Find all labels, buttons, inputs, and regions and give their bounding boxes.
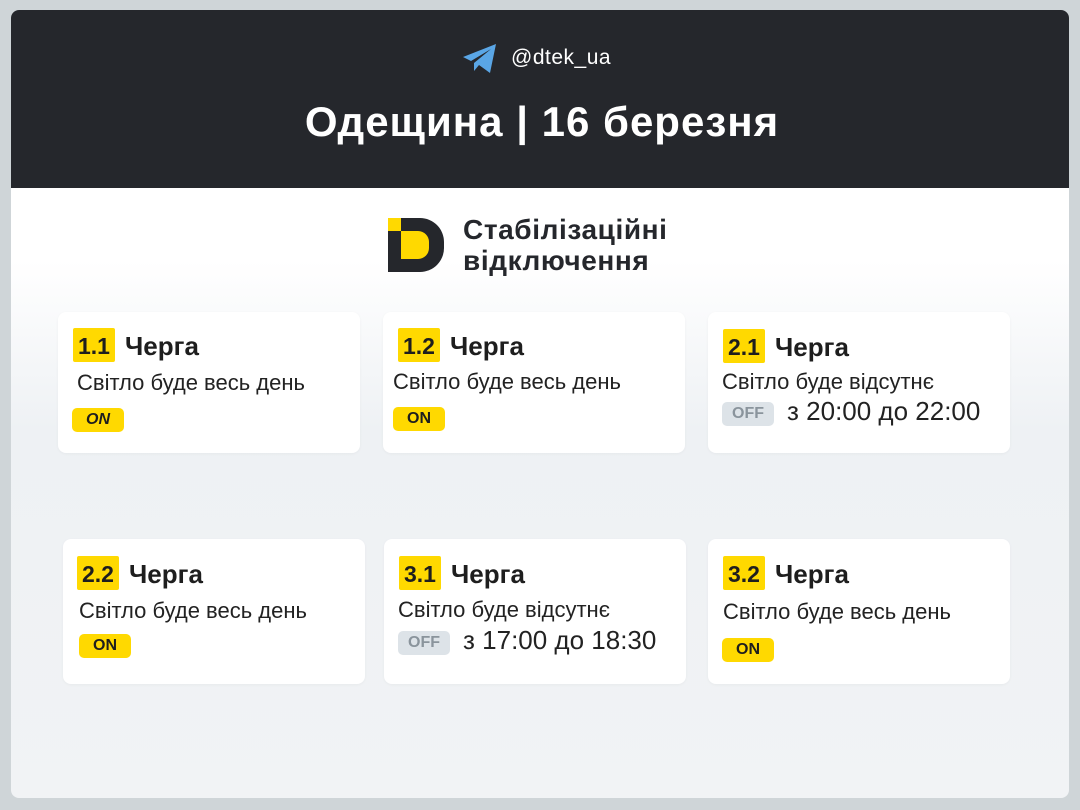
card 3.1: OFF	[408, 634, 440, 651]
logo block	[388, 214, 668, 276]
card 3.2: Черга	[775, 559, 849, 589]
card 3.1: з 17:00 до 18:30	[463, 625, 656, 655]
card 1.1: ON	[86, 411, 110, 428]
card 1.1: Черга	[125, 331, 199, 361]
card 3.2: 3.2	[728, 561, 760, 587]
card 1.2: 1.2	[403, 333, 435, 359]
card 1.2: Черга	[450, 331, 524, 361]
logo text	[463, 214, 668, 276]
card 1.1: Світло буде весь день	[77, 370, 305, 395]
card 1.2	[383, 312, 685, 453]
icon: dtek logo	[388, 218, 444, 272]
card 1.2: Світло буде весь день	[393, 369, 621, 394]
card 3.2: Світло буде весь день	[723, 599, 951, 624]
card 2.1: OFF	[732, 405, 764, 422]
card 1.2: ON	[407, 410, 431, 427]
icon: telegram	[463, 44, 496, 73]
card 2.1: 2.1	[728, 334, 760, 360]
card 3.2	[708, 539, 1010, 684]
card 2.2: Світло буде весь день	[79, 598, 307, 623]
title: Одещина | 16 березня	[305, 98, 779, 145]
card 1.1: 1.1	[78, 333, 110, 359]
card 2.1: Черга	[775, 332, 849, 362]
logo text: Стабілізаційні	[463, 214, 668, 245]
logo text: відключення	[463, 245, 649, 276]
card 2.1: Світло буде відсутнє	[722, 369, 934, 394]
card 2.1	[708, 312, 1010, 453]
card 3.1: Світло буде відсутнє	[398, 597, 610, 622]
card 2.1: з 20:00 до 22:00	[787, 396, 980, 426]
card 3.1	[384, 539, 686, 684]
card 2.2: ON	[93, 637, 117, 654]
card 1.1	[58, 312, 360, 453]
card 3.1: 3.1	[404, 561, 436, 587]
card 3.2: ON	[736, 641, 760, 658]
card 2.2	[63, 539, 365, 684]
card 2.2: Черга	[129, 559, 203, 589]
handle: @dtek_ua	[511, 46, 611, 69]
card 3.1: Черга	[451, 559, 525, 589]
card 2.2: 2.2	[82, 561, 114, 587]
header bar	[11, 10, 1069, 188]
